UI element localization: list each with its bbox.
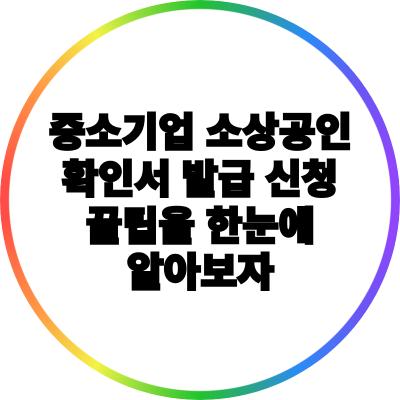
title line 1: 중소기업 소상공인 (49, 112, 352, 155)
title line 2: 확인서 발급 신청 (62, 159, 338, 202)
title line 3: 꿀팁을 한눈에 (86, 206, 315, 249)
title line 4: 알아보자 (127, 252, 274, 295)
